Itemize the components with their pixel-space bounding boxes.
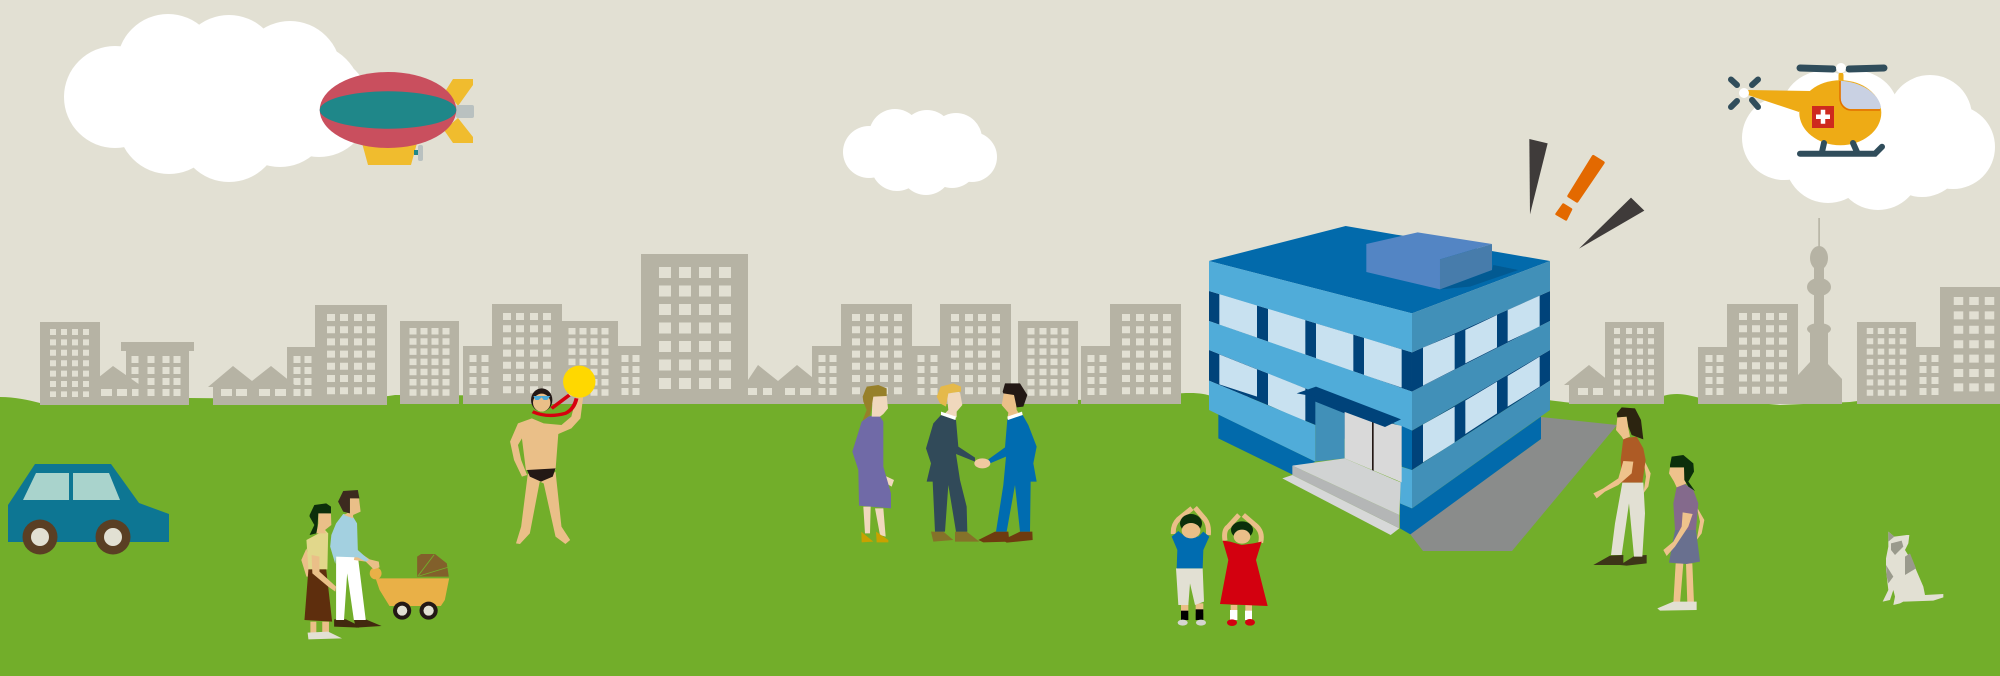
green ground: [0, 393, 2000, 676]
girl: [1220, 515, 1268, 626]
light blue left bands: [1209, 261, 1412, 508]
woman in brown shirt: [1593, 407, 1651, 566]
doors: [1345, 412, 1402, 482]
right house windows: [1578, 388, 1603, 395]
city skyline: right group: [1564, 287, 2000, 404]
dog: [1883, 532, 1943, 605]
skyline windows: left group: [53, 267, 1167, 397]
entrance column: [1402, 426, 1412, 470]
children with arms up: [1172, 508, 1268, 626]
right wall navy strips: [1412, 291, 1550, 392]
roof: [1209, 226, 1550, 313]
building base: [1218, 414, 1315, 475]
cloud: small middle: [843, 109, 997, 195]
skyline windows: right group: [1617, 297, 1990, 397]
swimmer with ball: [510, 366, 595, 544]
stroller: [370, 554, 449, 620]
tower: [1798, 218, 1842, 404]
helicopter: [1731, 63, 1884, 154]
couple with stroller: [301, 490, 449, 639]
exclamation mark and alert spikes: [1529, 139, 1644, 249]
darker blue right bands: [1412, 261, 1550, 508]
windows: [1219, 294, 1540, 462]
woman in brown shirt, girl and dog: [1593, 407, 1943, 611]
city skyline: left group: [40, 254, 1181, 405]
girl in purple: [1657, 455, 1704, 611]
rooftop unit: [1366, 232, 1518, 289]
man in blue shirt: [330, 490, 382, 628]
car: [8, 464, 169, 554]
canopy: [1297, 387, 1401, 427]
business people shaking hands and woman in purple: [852, 383, 1037, 543]
entrance side wall: [1315, 402, 1345, 462]
cloud: large left: [64, 14, 370, 182]
boy: [1172, 508, 1209, 626]
woman with brown skirt: [301, 503, 342, 639]
blue building: [1209, 226, 1550, 535]
blimp: [320, 72, 474, 165]
man in navy suit: [926, 383, 979, 542]
entrance steps: [1282, 458, 1401, 535]
handshake: [974, 458, 990, 468]
left wall navy strips: [1209, 291, 1412, 392]
road to building: [1410, 417, 1617, 551]
houses: left group: [89, 365, 823, 405]
man in blue suit: [978, 383, 1037, 543]
woman in purple dress: [852, 385, 894, 542]
cloud: right behind helicopter: [1742, 71, 1995, 210]
